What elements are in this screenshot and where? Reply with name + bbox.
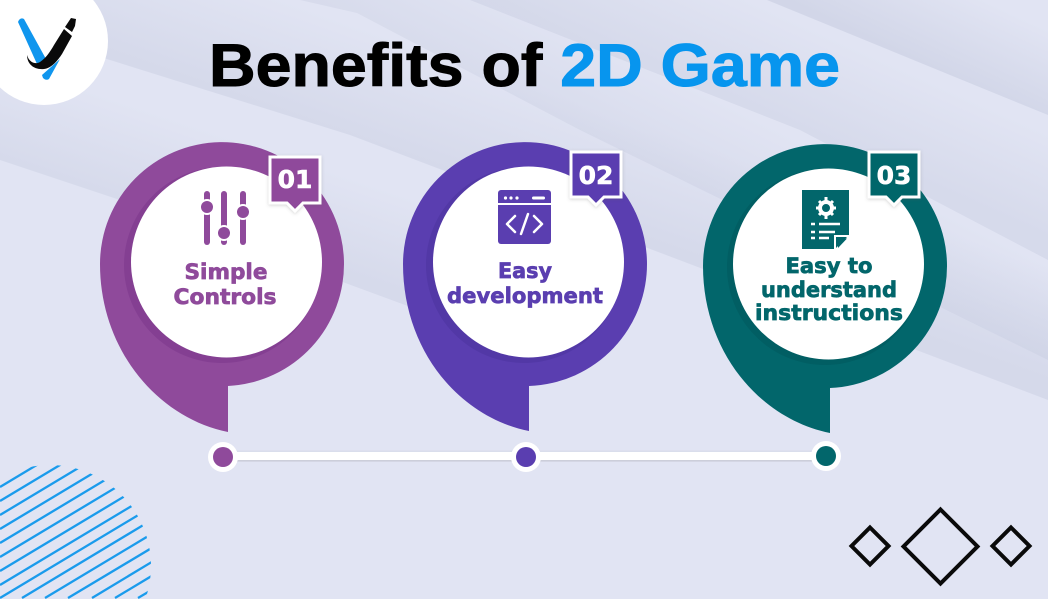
label: understand (761, 278, 897, 302)
number badge: 02 (579, 161, 613, 190)
panel: easy to understand instructions (703, 144, 947, 433)
decorative striped circle (0, 465, 151, 599)
number badge (571, 152, 621, 205)
label: instructions (755, 301, 903, 325)
label: Controls (174, 285, 276, 309)
pin shape (403, 142, 647, 431)
icon: sliders (199, 191, 251, 245)
pin shape (703, 144, 947, 433)
pin shape (100, 142, 344, 432)
white disc (733, 168, 924, 360)
timeline node 2 (511, 442, 541, 472)
label: Easy (498, 259, 552, 283)
title: Benefits of 2D Game (209, 32, 840, 99)
timeline (208, 441, 841, 472)
decorative diamonds (852, 510, 1030, 584)
inner shadow (426, 167, 622, 363)
logo mark: black pen (27, 18, 76, 69)
white disc (433, 166, 624, 358)
icon: code window (498, 190, 551, 244)
number badge: 01 (278, 165, 312, 194)
panel: easy development (403, 142, 647, 431)
timeline node 1 (208, 442, 238, 472)
inner shadow (124, 167, 320, 363)
logo mark: blue check (18, 18, 60, 80)
label: Easy to (786, 254, 872, 278)
icon: document with gear (802, 190, 849, 249)
label: development (447, 284, 603, 308)
number badge (869, 152, 919, 205)
white disc (131, 166, 322, 358)
number badge: 03 (877, 161, 911, 190)
number badge (270, 157, 320, 211)
inner shadow (727, 169, 923, 365)
label: Simple (184, 260, 268, 284)
logo badge (0, 0, 108, 105)
panel: simple controls (100, 142, 344, 432)
timeline node 3 (811, 441, 841, 471)
